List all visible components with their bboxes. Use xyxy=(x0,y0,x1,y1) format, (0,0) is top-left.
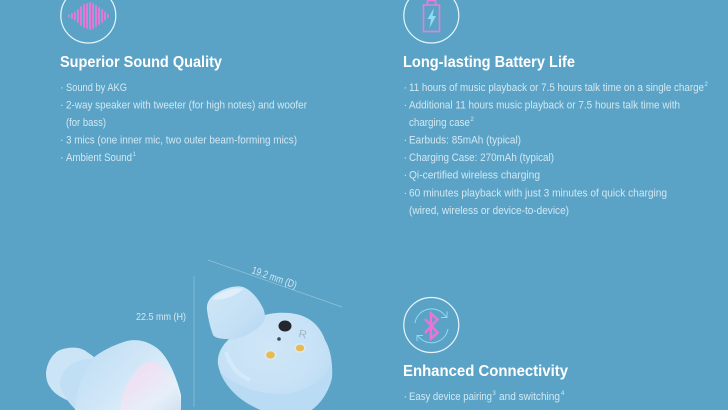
bullet list: battery features: · xyxy=(404,152,407,164)
bullet list: battery features: · xyxy=(404,82,407,94)
label: depth: 19.2 mm (D) xyxy=(250,265,298,291)
bullet list: battery features: · xyxy=(404,170,407,182)
bullet list: connectivity features: · xyxy=(404,391,407,403)
bullet list: sound features: (for bass) xyxy=(66,117,106,129)
bullet list: sound features: 1 xyxy=(132,152,136,158)
bullet list: battery features: (wired, wireless or device-to-device) xyxy=(409,205,569,217)
bullet list: sound features: · xyxy=(60,82,64,94)
heading: Long-lasting Battery Life: Long-lasting Battery Life xyxy=(403,54,575,71)
bullet list: connectivity features: 3 xyxy=(492,391,496,397)
panel: earbud dimensions xyxy=(46,260,342,410)
bullet list: battery features: 2 xyxy=(470,117,474,123)
icon: battery xyxy=(404,0,459,43)
panel: battery life xyxy=(403,0,708,217)
bullet list: sound features: Sound by AKG xyxy=(66,82,127,94)
bullet list: sound features: · xyxy=(60,152,64,164)
bullet list: battery features xyxy=(404,82,708,217)
bullet list: sound features: 3 mics (one inner mic, two outer beam-forming mics) xyxy=(66,134,297,146)
earbud: left xyxy=(46,340,181,410)
bullet list: sound features: · xyxy=(60,100,64,112)
heading: Superior Sound Quality: Superior Sound Quality xyxy=(60,54,222,71)
height dimension line xyxy=(193,276,195,407)
bullet list: battery features: Qi-certified wireless charging xyxy=(409,170,540,182)
bullet list: battery features: Earbuds: 85mAh (typical) xyxy=(409,134,521,146)
bullet list: sound features: 2-way speaker with tweeter (for high notes) and woofer xyxy=(66,100,307,112)
panel: connectivity xyxy=(403,298,568,403)
bullet list: battery features: Charging Case: 270mAh (typical) xyxy=(409,152,554,164)
depth dimension line xyxy=(208,260,342,307)
bullet list: connectivity features xyxy=(404,391,565,403)
bullet list: battery features: charging case xyxy=(409,117,470,129)
earbud: right xyxy=(207,286,332,410)
panel: sound quality xyxy=(60,0,307,164)
bullet list: connectivity features: 4 xyxy=(561,391,565,397)
bullet list: battery features: 2 xyxy=(704,82,708,88)
heading: Enhanced Connectivity: Enhanced Connectivity xyxy=(403,363,568,380)
bullet list: sound features: Ambient Sound xyxy=(66,152,132,164)
bullet list: sound features: · xyxy=(60,134,64,146)
bullet list: battery features: Additional 11 hours music playback or 7.5 hours talk time with xyxy=(409,100,680,112)
label: height: 22.5 mm (H) xyxy=(136,311,186,323)
bullet list: battery features: · xyxy=(404,100,407,112)
bullet list: battery features: 60 minutes playback with just 3 minutes of quick charging xyxy=(409,188,667,200)
bullet list: battery features: · xyxy=(404,188,407,200)
icon: sound wave xyxy=(61,0,116,43)
letter R: R xyxy=(297,328,308,341)
bullet list: connectivity features: and switching xyxy=(499,391,560,403)
bullet list: connectivity features: Easy device pairing xyxy=(409,391,492,403)
bullet list: sound features xyxy=(60,82,307,164)
icon: bluetooth xyxy=(404,298,459,352)
bullet list: battery features: · xyxy=(404,134,407,146)
